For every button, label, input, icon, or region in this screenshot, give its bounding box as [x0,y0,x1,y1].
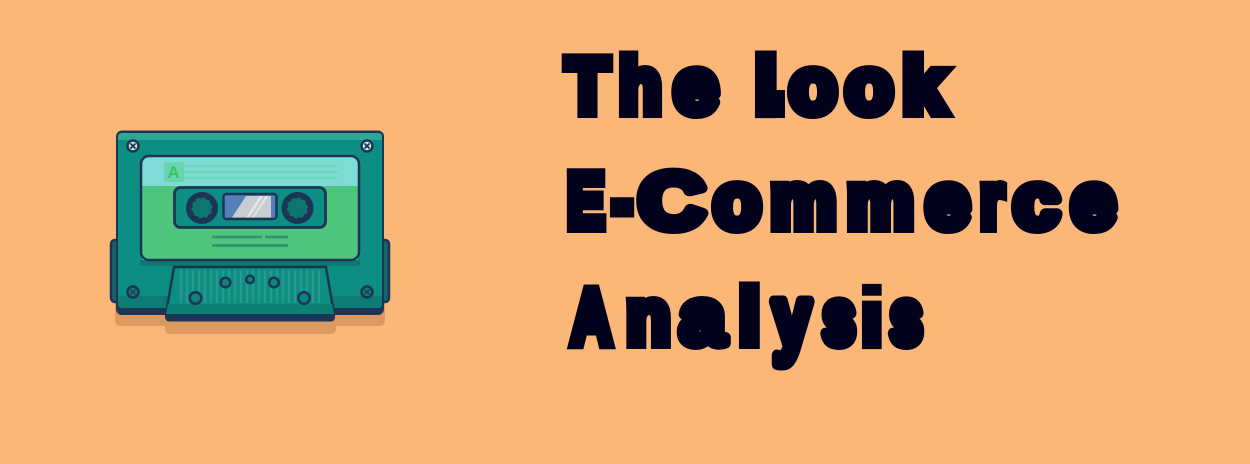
title line 2: E [567,158,605,245]
title line 1 [566,42,946,130]
title line 2: r [980,157,1004,244]
title line 2: c [1014,156,1059,244]
title line 2: m [847,158,914,245]
title line 3 [571,270,923,366]
title line 3: y [773,270,810,366]
title line 2 [567,156,1116,245]
title line 1: h [619,42,661,129]
title line 2: C [639,157,705,244]
icon: cassette tape [111,130,389,334]
side letter: A [167,163,180,182]
title line 3: s [890,272,923,360]
title line 2: - [612,156,632,244]
reel window [174,188,326,228]
title line 1: l [755,42,777,130]
title line 1: o [789,43,837,130]
cassette drop shadow [115,300,385,334]
title line 3: a [680,273,726,360]
title line 2: e [1071,157,1116,244]
label panel [140,156,360,266]
title line 1: e [674,42,718,129]
title line 1: T [566,42,609,129]
title line 1: o [845,43,893,130]
title line 1: k [902,43,946,130]
side bumps [111,240,389,302]
title line 2: e [926,157,970,244]
screws [128,140,372,298]
title line 3: s [822,273,856,360]
title line 3: A [571,274,612,361]
title line 2: m [770,158,836,245]
title line 3: l [739,274,760,361]
title line 2: o [713,158,761,245]
tape head tab [165,267,335,322]
cassette body [116,130,384,315]
title line 3: n [626,273,670,360]
title [566,42,1116,366]
title line 3: i [856,271,887,366]
